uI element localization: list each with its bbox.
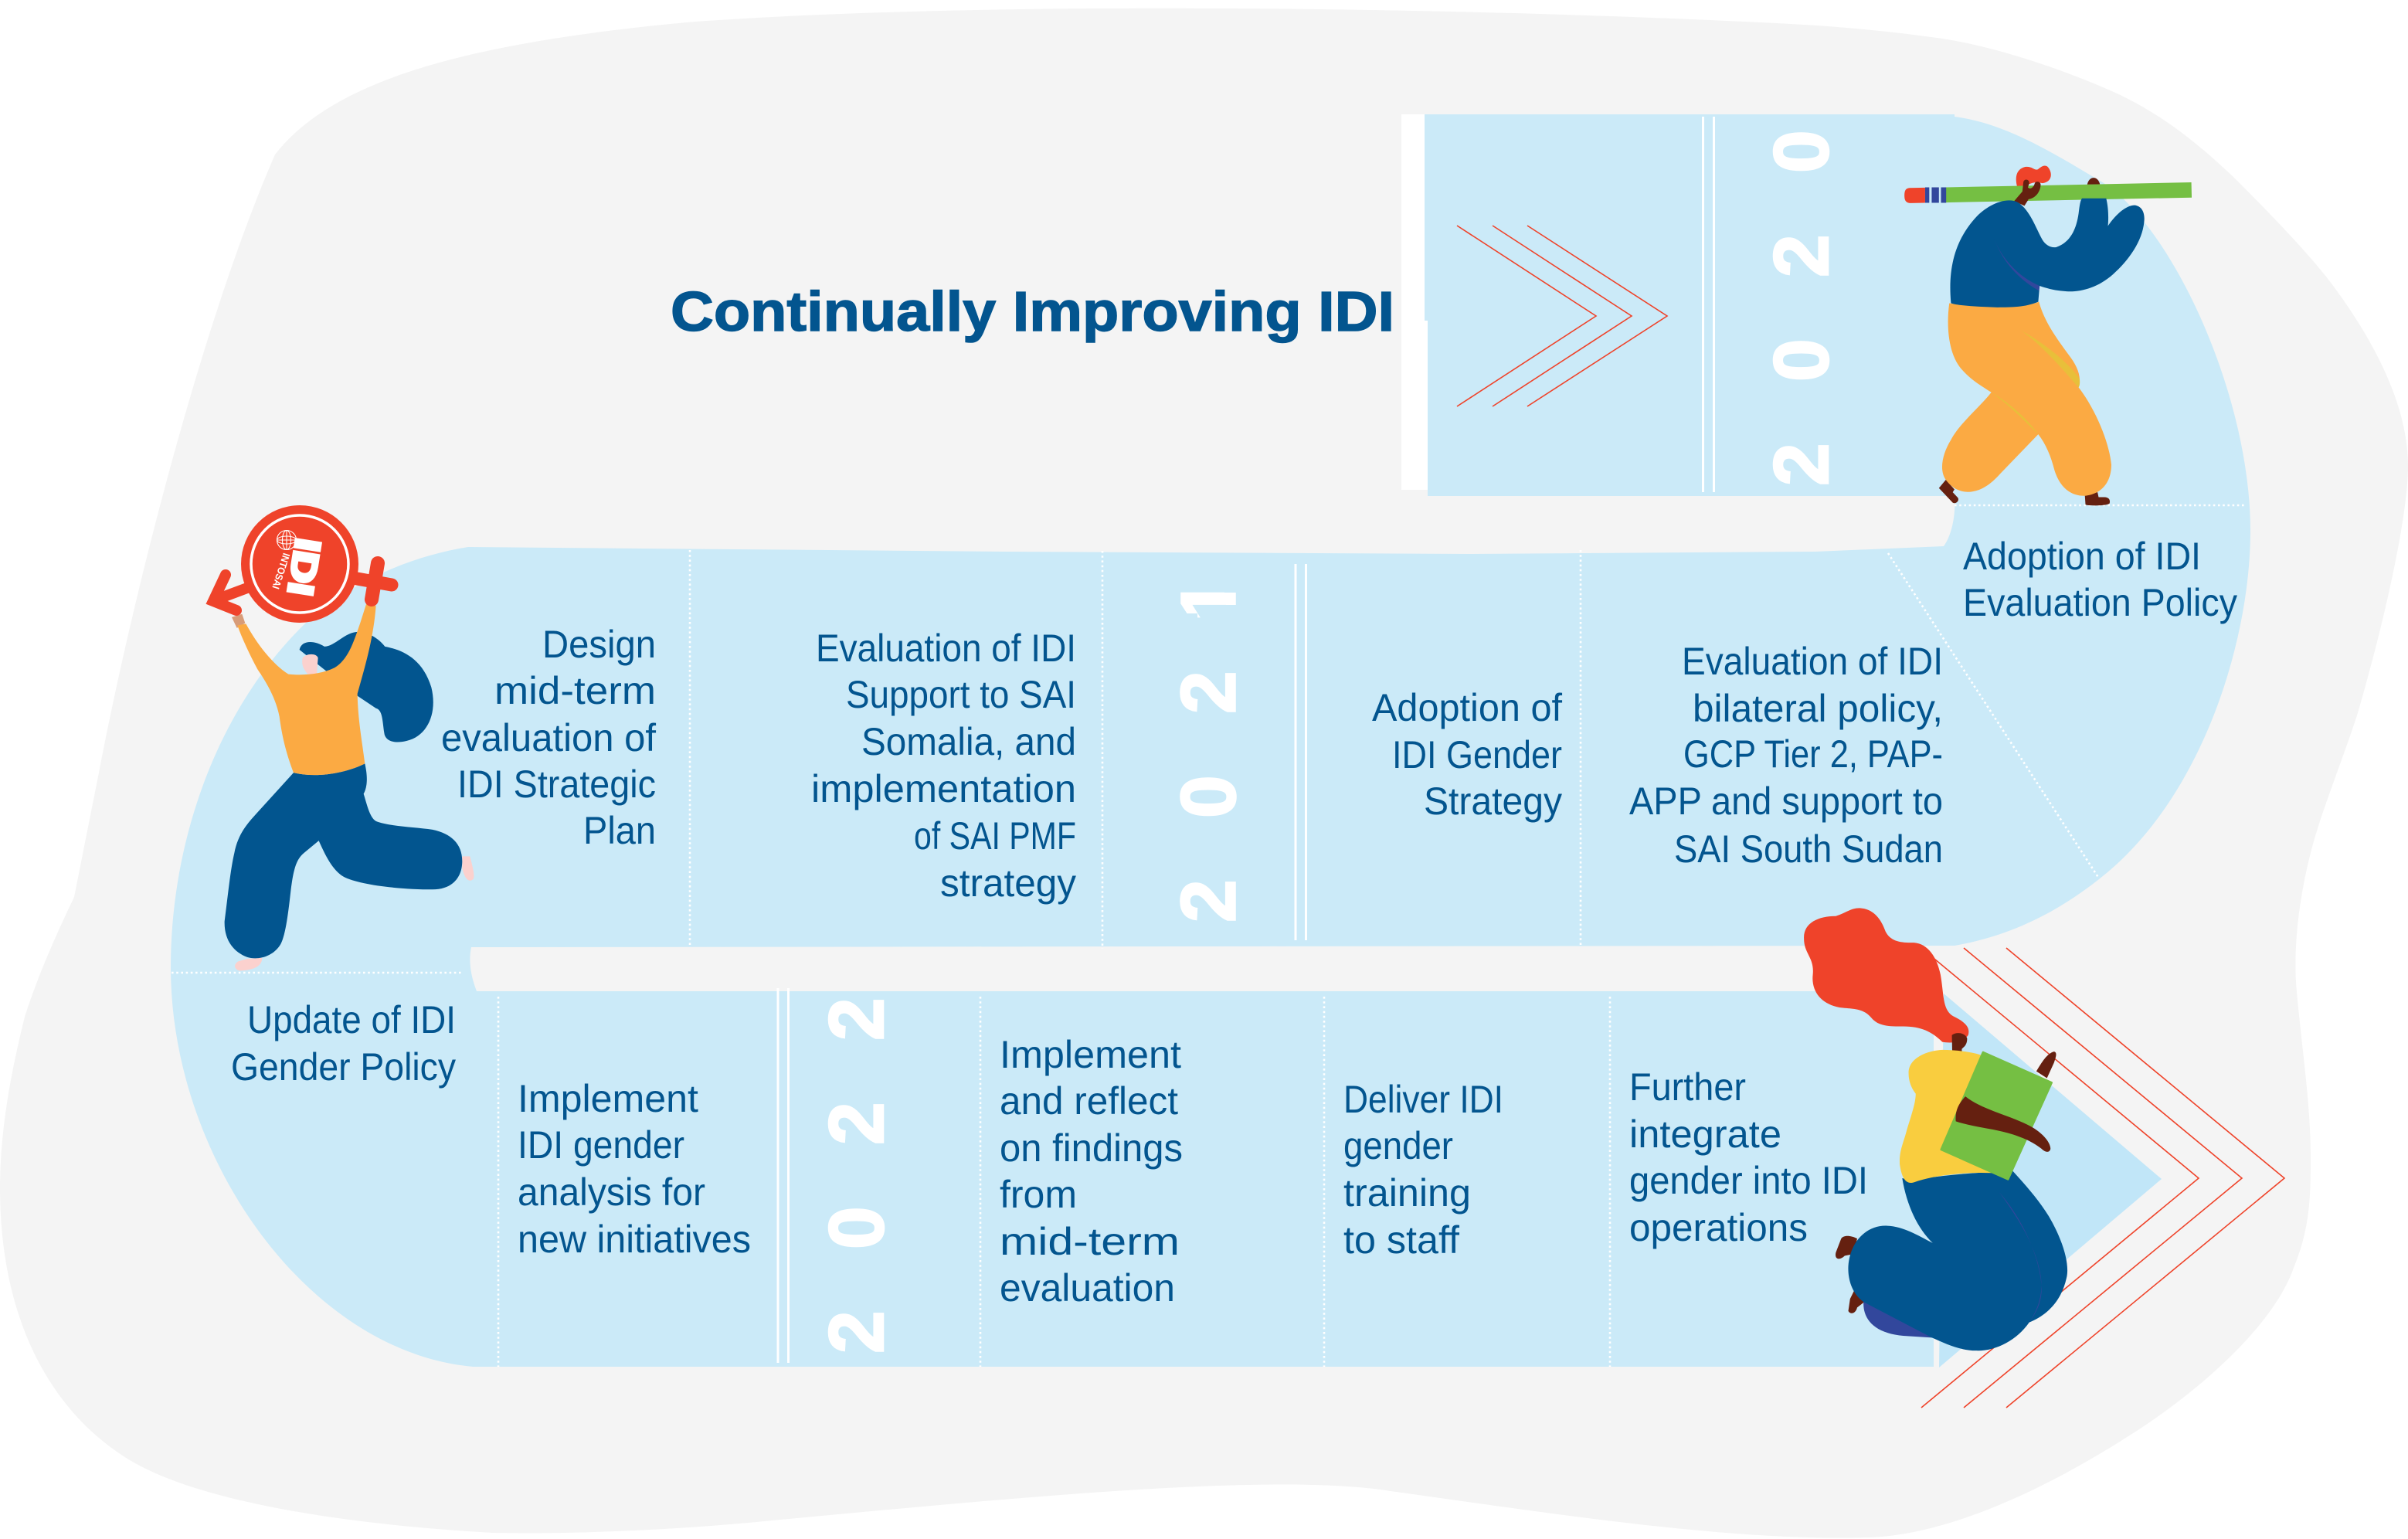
man: feet — [1939, 480, 2110, 505]
text: implement gender analysis: new initiatives — [518, 1218, 751, 1261]
text: implement gender analysis — [518, 1077, 751, 1261]
text: implement and reflect: Implement — [1000, 1033, 1181, 1076]
text: adoption of gender strategy: Strategy — [1424, 780, 1562, 823]
text: evaluation of support to SAI Somalia: Evaluation of IDI — [816, 627, 1076, 670]
text: adoption of gender strategy: Adoption of — [1372, 686, 1562, 729]
year 2020: 2020 — [1758, 69, 1845, 486]
woman: trouser crease — [1999, 1192, 2042, 1323]
text: deliver gender training: training — [1343, 1171, 1471, 1215]
text: design mid-term evaluation: evaluation of — [441, 716, 656, 759]
text: evaluation of support to SAI Somalia: implementation — [811, 767, 1076, 810]
winding timeline road — [171, 114, 2250, 1367]
text: adoption of evaluation policy: Adoption of IDI — [1963, 535, 2201, 578]
man: trouser folds — [1992, 331, 2080, 434]
man: pencil — [1904, 182, 2192, 203]
woman: seat shadow — [1863, 1302, 1935, 1338]
arrow head of road — [1939, 994, 2162, 1367]
text: implement and reflect: on findings — [1000, 1126, 1183, 1170]
text: further integrate gender: gender into IDI — [1629, 1159, 1868, 1202]
woman: flowing red hair — [1804, 908, 1968, 1042]
text: evaluation of bilateral policy: bilateral policy, — [1693, 687, 1943, 730]
text: design mid-term evaluation — [441, 623, 656, 852]
woman: top — [237, 604, 376, 775]
figure: woman holding gender symbol — [213, 505, 474, 971]
text: update of gender policy: Update of IDI — [247, 998, 456, 1041]
gender symbol sign with IDI logo: INTOSAI — [270, 552, 292, 590]
text: implement gender analysis: IDI gender — [518, 1123, 684, 1167]
chevrons: top band — [1457, 226, 1667, 406]
text: evaluation of bilateral policy — [1629, 640, 1943, 871]
text: implement gender analysis: Implement — [518, 1077, 698, 1120]
woman: trousers — [1848, 1170, 2067, 1350]
text: evaluation of support to SAI Somalia — [811, 627, 1076, 905]
text: adoption of evaluation policy: Evaluation Policy — [1963, 581, 2237, 624]
year 2022: 2022 — [813, 936, 900, 1354]
man: trousers — [1942, 302, 2111, 496]
gender symbol sign with IDI logo — [213, 505, 392, 623]
woman: feet — [235, 856, 474, 971]
text: further integrate gender — [1629, 1065, 1868, 1249]
woman: hand — [232, 614, 245, 628]
man: neck and hand — [2014, 180, 2040, 206]
woman: neck — [1952, 1033, 1967, 1052]
text: further integrate gender: Further — [1629, 1065, 1746, 1109]
woman: raised hand — [2036, 1051, 2056, 1079]
text: evaluation of support to SAI Somalia: strategy — [940, 861, 1076, 905]
woman: neck — [302, 654, 318, 674]
woman: green book — [1941, 1052, 2052, 1179]
text: adoption of gender strategy: IDI Gender — [1392, 733, 1562, 776]
text: deliver gender training: to staff — [1343, 1218, 1459, 1262]
year dividers and dotted separators — [172, 117, 2244, 1367]
text: update of gender policy — [231, 998, 456, 1089]
text: evaluation of bilateral policy: SAI South Sudan — [1674, 827, 1943, 871]
text: design mid-term evaluation: Design — [542, 623, 656, 666]
man: hair — [2016, 166, 2051, 193]
man: sleeve crease — [1994, 239, 2039, 290]
text: evaluation of bilateral policy: APP and support to — [1629, 780, 1943, 823]
man: hand behind pencil — [2087, 178, 2100, 185]
text: adoption of gender strategy — [1372, 686, 1562, 823]
woman: shirt — [1900, 1050, 1992, 1183]
text: implement and reflect: evaluation — [1000, 1266, 1175, 1310]
gender symbol sign with IDI logo: IDI — [280, 535, 328, 599]
text: design mid-term evaluation: IDI Strategic — [457, 763, 656, 806]
text: deliver gender training — [1343, 1078, 1503, 1262]
year 2021: 2021 — [1165, 518, 1252, 922]
figure: man carrying pencil — [1904, 166, 2192, 505]
text: implement and reflect: and reflect — [1000, 1079, 1178, 1123]
text: evaluation of bilateral policy: Evaluation of IDI — [1682, 640, 1943, 683]
text: implement and reflect — [1000, 1033, 1183, 1310]
woman: trousers — [225, 763, 462, 958]
text: implement and reflect: from — [1000, 1173, 1077, 1216]
text: deliver gender training: gender — [1343, 1124, 1453, 1167]
text: evaluation of support to SAI Somalia: Somalia, and — [861, 720, 1076, 763]
figure: woman with book and red hair — [1804, 908, 2067, 1350]
text: design mid-term evaluation: Plan — [583, 809, 656, 852]
woman: feet — [1836, 1236, 1866, 1313]
woman: arm — [1955, 1096, 2050, 1152]
woman: hair — [300, 632, 433, 742]
text: further integrate gender: operations — [1629, 1206, 1808, 1249]
text: evaluation of support to SAI Somalia: Support to SAI — [846, 673, 1076, 716]
text: design mid-term evaluation: mid-term — [494, 669, 656, 712]
text: further integrate gender: integrate — [1629, 1113, 1781, 1156]
text: evaluation of support to SAI Somalia: of SAI PMF — [914, 814, 1076, 858]
man: sweater — [1950, 199, 2145, 307]
text: deliver gender training: Deliver IDI — [1343, 1078, 1503, 1121]
white panel beside top band — [1401, 114, 1429, 490]
title: Continually Improving IDI — [671, 281, 1394, 343]
text: adoption of evaluation policy — [1963, 535, 2237, 624]
text: evaluation of bilateral policy: GCP Tier 2, PAP- — [1683, 732, 1943, 776]
text: implement and reflect: mid-term — [1000, 1220, 1180, 1263]
text: update of gender policy: Gender Policy — [231, 1045, 456, 1089]
text: implement gender analysis: analysis for — [518, 1170, 705, 1214]
chevrons: finish arrow — [1921, 948, 2284, 1408]
